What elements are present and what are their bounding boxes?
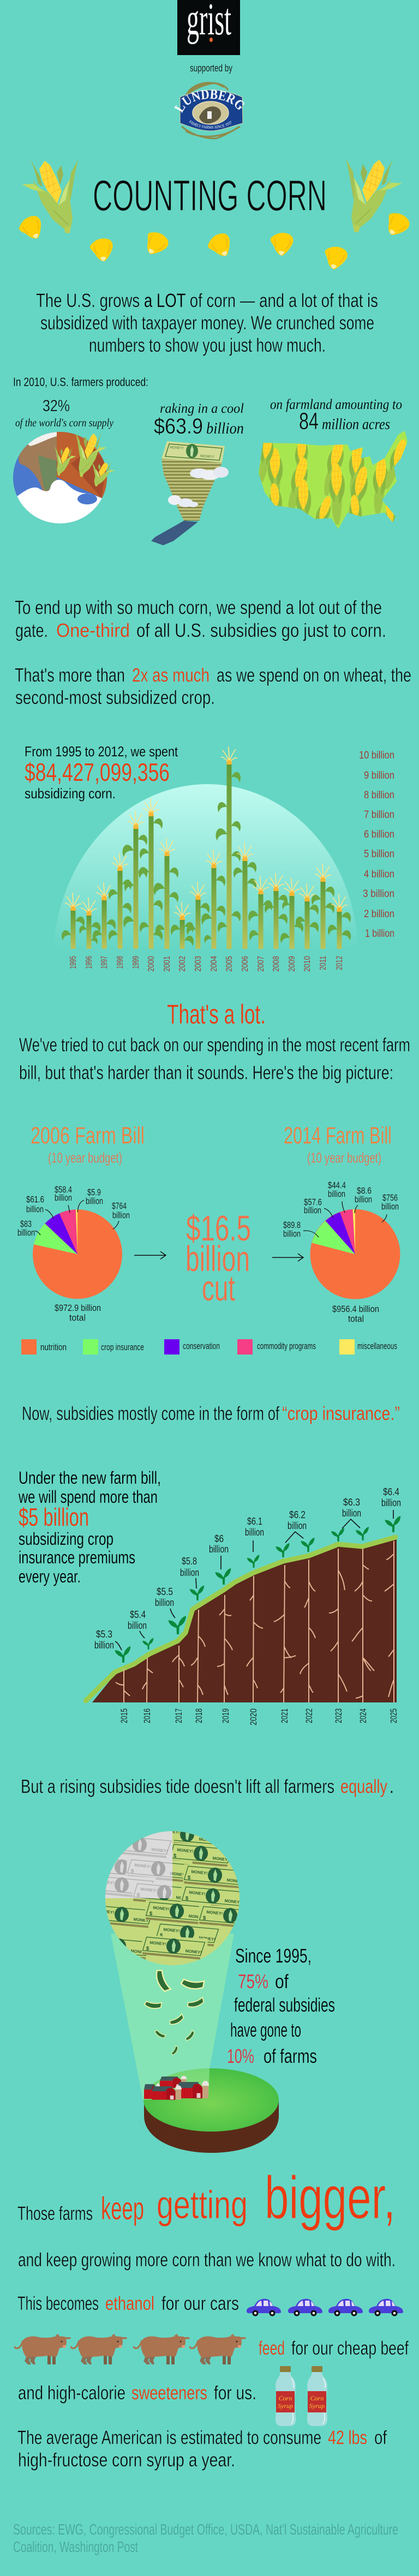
pie labels: $764 xyxy=(112,1201,127,1211)
text: sources xyxy=(13,2521,398,2555)
intro text xyxy=(36,290,378,356)
pie labels: $44.4 xyxy=(328,1180,346,1190)
pie labels: billion xyxy=(112,1210,130,1220)
stat: 63.9 billion xyxy=(154,401,244,438)
panel: 2010 production xyxy=(11,375,411,545)
stat: 84 million acres xyxy=(270,396,402,435)
axis: years xyxy=(69,956,344,972)
callout: 16.5 billion cut: cut xyxy=(202,1268,235,1308)
text: 5 billion callout: $5 billion xyxy=(19,1503,89,1531)
text: 5 billion callout: Under the new farm bill, xyxy=(19,1468,161,1488)
value labels: billion xyxy=(155,1597,174,1608)
value labels: billion xyxy=(288,1520,307,1531)
value labels: $6.2 xyxy=(289,1509,306,1520)
grist logo xyxy=(177,0,240,55)
axis: billions: 8 billion xyxy=(364,790,394,801)
grass band xyxy=(86,1537,396,1701)
year labels: 2022 xyxy=(304,1708,314,1723)
value labels: billion xyxy=(94,1640,114,1651)
pie labels: $58.4 xyxy=(55,1184,72,1195)
text: 42 lbs: of xyxy=(374,2427,387,2448)
axis: billions: 5 billion xyxy=(364,848,394,860)
stat: 84 million acres: million acres xyxy=(322,416,390,433)
value labels: billion xyxy=(381,1497,401,1508)
text: subsidies share: gate. xyxy=(15,620,48,641)
year labels: 2020 xyxy=(248,1708,259,1725)
text: 75 percent of subsidies: of xyxy=(275,1970,289,1993)
supported by text: supported by xyxy=(190,63,232,74)
chart: 2014 farm bill pie: (10 year budget) xyxy=(307,1149,381,1166)
stalks xyxy=(62,747,351,949)
axis: years: 2012 xyxy=(335,956,344,970)
pie labels: billion xyxy=(55,1193,72,1203)
year labels: 2025 xyxy=(388,1708,399,1723)
text: farms keep getting bigger: Those farms xyxy=(17,2203,93,2224)
text: subsidies share: second-most subsidized crop. xyxy=(15,687,215,708)
text: 75 percent of subsidies: federal subsidies xyxy=(234,1994,335,2016)
pie labels: $83 xyxy=(20,1219,32,1229)
axis: billions xyxy=(359,750,394,940)
pie labels: $89.8 xyxy=(283,1220,301,1230)
pie labels: $57.6 xyxy=(304,1197,322,1207)
Lundberg sponsor logo: LUNDBERG xyxy=(174,89,244,113)
legend: miscellaneous xyxy=(357,1341,397,1351)
pie xyxy=(33,1209,122,1299)
text: 5 billion callout: subsidizing crop xyxy=(19,1529,113,1549)
icon: earth with corn xyxy=(11,428,116,527)
legend xyxy=(21,1339,397,1355)
axis: billions: 2 billion xyxy=(364,908,394,920)
text: 42 lbs: high-fructose corn syrup a year. xyxy=(18,2449,235,2471)
text: farms keep getting bigger xyxy=(17,2164,396,2231)
icon: tornado of money: MONEY! xyxy=(200,454,214,459)
year labels: 2024 xyxy=(358,1708,368,1723)
value labels: $5.4 xyxy=(130,1609,146,1620)
stat: 63.9 billion: raking in a cool xyxy=(160,401,244,416)
axis: years: 2003 xyxy=(194,956,203,972)
text: 42 lbs: The average American is estimated to consume xyxy=(17,2427,321,2448)
chart: insurance hill xyxy=(86,1486,401,1725)
text: farms keep getting bigger: keep xyxy=(101,2191,144,2226)
text: subsidies share: That's more than xyxy=(15,665,125,686)
value labels: billion xyxy=(342,1508,361,1519)
pie labels xyxy=(17,1184,130,1323)
illustration: land and barns xyxy=(111,1934,279,2153)
chart: 2014 farm bill pie xyxy=(283,1122,400,1324)
text: rising tide: But a rising subsidies tide doesn't lift all farmers xyxy=(21,1776,334,1797)
legend: crop insurance xyxy=(101,1342,144,1352)
pie labels: billion xyxy=(26,1204,44,1214)
chart: 2006 farm bill pie: 2006 Farm Bill xyxy=(31,1122,145,1149)
legend: nutrition xyxy=(40,1342,67,1352)
value labels: $5.5 xyxy=(157,1586,173,1597)
text: rising tide: equally xyxy=(340,1776,387,1797)
year labels: 2015 xyxy=(119,1708,129,1723)
Lundberg sponsor logo xyxy=(174,82,244,140)
stat: 63.9 billion: $63.9 xyxy=(154,414,203,438)
pie labels: $756 xyxy=(382,1193,398,1203)
chart: 2006 farm bill pie xyxy=(17,1122,145,1323)
icon: corn syrup bottles xyxy=(276,2366,327,2426)
text: 42 lbs: 42 lbs xyxy=(328,2427,367,2448)
text: total spent: From 1995 to 2012, we spent xyxy=(25,743,178,760)
axis: years: 2001 xyxy=(163,956,172,972)
value labels: $5.8 xyxy=(182,1556,197,1567)
year labels xyxy=(119,1708,399,1725)
text: ethanol: for our cars xyxy=(161,2293,239,2314)
axis: years: 1999 xyxy=(131,956,141,969)
value labels: billion xyxy=(245,1527,264,1538)
icon: tornado of money: MONEY! xyxy=(170,446,184,450)
stat: 63.9 billion: billion xyxy=(206,419,244,437)
text: 75 percent of subsidies: 10% xyxy=(227,2045,254,2067)
axis: years: 1996 xyxy=(85,956,94,969)
stat: 32 percent: 32% xyxy=(43,397,70,415)
icon: left corn ear xyxy=(22,160,78,233)
pie labels: $5.9 xyxy=(87,1187,101,1197)
axis: years: 2009 xyxy=(288,956,297,972)
illustration: money circle xyxy=(105,1831,240,1965)
year labels: 2017 xyxy=(173,1708,184,1723)
land disc xyxy=(143,2068,279,2153)
heading: that's a lot: That's a lot. xyxy=(167,999,266,1030)
Lundberg sponsor logo: FAMILY FARMS SINCE 1937 xyxy=(189,120,231,129)
pie labels: $972.9 billion xyxy=(55,1303,101,1313)
pie labels: total xyxy=(69,1313,86,1323)
stat: 32 percent: of the world's corn supply xyxy=(15,416,114,429)
axis: billions: 9 billion xyxy=(364,770,394,781)
pie labels: billion xyxy=(304,1205,321,1215)
axis: billions: 7 billion xyxy=(364,809,394,821)
axis: years: 2010 xyxy=(303,956,312,972)
arrow: from cut xyxy=(272,1254,303,1261)
beam of light xyxy=(111,1934,234,2100)
axis: years: 2006 xyxy=(241,956,250,972)
arrow: to cut xyxy=(134,1251,166,1259)
text: sweeteners: and high-calorie xyxy=(18,2382,125,2404)
text: 5 billion callout: insurance premiums xyxy=(19,1548,135,1567)
axis: billions: 3 billion xyxy=(363,888,394,900)
text: 75 percent of subsidies: Since 1995, xyxy=(235,1945,312,1967)
title with corn xyxy=(19,159,412,272)
text: 75 percent of subsidies: of farms xyxy=(264,2045,317,2067)
callout: 16.5 billion cut: $16.5 xyxy=(186,1208,251,1248)
axis: years: 2002 xyxy=(178,956,187,972)
axis: years: 2011 xyxy=(319,956,328,970)
year labels: 2021 xyxy=(279,1708,290,1723)
text: 5 billion callout: every year. xyxy=(19,1567,81,1586)
text: crop insurance: Now, subsidies mostly come in the form of xyxy=(22,1403,279,1424)
pie labels: billion xyxy=(328,1189,345,1199)
hill soil xyxy=(92,1539,397,1702)
text: sweeteners xyxy=(18,2382,256,2404)
text: 5 billion callout xyxy=(18,1468,161,1586)
axis: billions: 1 billion xyxy=(365,928,394,940)
axis: billions: 6 billion xyxy=(364,829,394,840)
axis: years: 2005 xyxy=(225,956,234,972)
icon: falling bills xyxy=(143,1969,207,2055)
chart: corn subsidies by year xyxy=(25,743,394,972)
text: sources: Coalition, Washington Post xyxy=(13,2538,138,2555)
pie labels: billion xyxy=(17,1227,35,1238)
year labels: 2023 xyxy=(333,1708,344,1723)
pie labels: total xyxy=(348,1314,364,1324)
text: ethanol: This becomes xyxy=(17,2293,99,2314)
legend: conservation xyxy=(183,1341,220,1351)
icon: corn kernels xyxy=(19,208,412,272)
roots xyxy=(116,1541,394,1702)
text: 42 lbs xyxy=(17,2427,387,2471)
text: farms keep getting bigger: getting xyxy=(157,2183,248,2227)
value labels: $5.3 xyxy=(96,1629,112,1640)
value labels: $6.3 xyxy=(343,1497,360,1508)
text: 75 percent of subsidies: have gone to xyxy=(230,2019,301,2041)
value labels: $6.4 xyxy=(383,1486,399,1497)
text: subsidies share xyxy=(15,597,411,708)
axis: years: 2000 xyxy=(147,956,156,972)
pie labels: billion xyxy=(86,1196,103,1206)
text: farm bill intro xyxy=(19,1034,410,1084)
value labels: $6 xyxy=(214,1533,224,1544)
axis: years: 1995 xyxy=(69,956,78,969)
text: ethanol xyxy=(17,2293,239,2314)
text: total spent: subsidizing corn. xyxy=(25,785,116,802)
sprouts xyxy=(115,1516,400,1663)
stat: 84 million acres: on farmland amounting to xyxy=(270,396,402,412)
year labels: 2019 xyxy=(220,1708,231,1723)
callout: 16.5 billion cut: billion xyxy=(185,1238,250,1279)
axis: billions: 10 billion xyxy=(359,750,394,761)
pie labels: $61.6 xyxy=(26,1194,44,1205)
icon: cars xyxy=(247,2299,403,2316)
text: 75 percent of subsidies xyxy=(227,1945,335,2067)
intro text: numbers to show you just how much. xyxy=(89,335,326,356)
axis: years: 2008 xyxy=(272,956,281,972)
value labels xyxy=(94,1486,401,1651)
value labels: billion xyxy=(128,1620,147,1631)
value labels: $6.1 xyxy=(247,1516,262,1527)
barns xyxy=(144,2076,209,2100)
text: feed: feed xyxy=(259,2338,285,2359)
axis: years: 2007 xyxy=(256,956,266,972)
text: rising tide: . xyxy=(389,1776,394,1797)
text: 5 billion callout: we will spend more than xyxy=(18,1487,158,1507)
chart: 2006 farm bill pie: (10 year budget) xyxy=(48,1149,122,1166)
callout: 16.5 billion cut xyxy=(185,1208,251,1308)
axis: billions: 4 billion xyxy=(364,869,394,880)
grey quadrant xyxy=(105,1831,172,1898)
text: subsidies share: One-third xyxy=(56,620,130,641)
text: total spent: $84,427,099,356 xyxy=(25,758,170,786)
axis: years: 1997 xyxy=(100,956,109,969)
pie labels: $8.6 xyxy=(357,1185,372,1196)
axis: years: 1998 xyxy=(116,956,125,969)
pie labels: billion xyxy=(283,1229,301,1239)
legend: commodity programs xyxy=(257,1341,316,1351)
pie labels: billion xyxy=(355,1194,372,1205)
pie labels: $956.4 billion xyxy=(332,1304,379,1314)
icon: tornado of money xyxy=(151,441,229,545)
icon: US map of corn xyxy=(259,431,408,529)
pie labels: billion xyxy=(381,1201,399,1212)
pie labels xyxy=(283,1180,399,1324)
icon: right corn ear xyxy=(346,159,402,232)
stat: 32 percent xyxy=(15,397,114,429)
axis: years: 2004 xyxy=(210,956,219,972)
text: 75 percent of subsidies: 75% xyxy=(238,1970,268,1993)
text: sweeteners: sweeteners xyxy=(131,2382,207,2404)
text: subsidies share: 2x as much xyxy=(132,665,210,686)
pie xyxy=(310,1209,400,1299)
value labels: billion xyxy=(209,1544,229,1555)
chart background dome xyxy=(53,784,358,949)
year labels: 2016 xyxy=(142,1708,152,1723)
icon: cows xyxy=(15,2334,246,2364)
text: in 2010: In 2010, U.S. farmers produced: xyxy=(13,375,148,389)
stat: 84 million acres: 84 xyxy=(299,408,319,435)
text: ethanol: ethanol xyxy=(105,2293,154,2314)
value labels: billion xyxy=(180,1567,199,1578)
text: sweeteners: for us. xyxy=(214,2382,256,2404)
text: total spent xyxy=(25,743,178,802)
intro text: The U.S. grows a LOT of corn — and a lot of that is xyxy=(36,290,378,311)
year labels: 2018 xyxy=(194,1708,204,1723)
